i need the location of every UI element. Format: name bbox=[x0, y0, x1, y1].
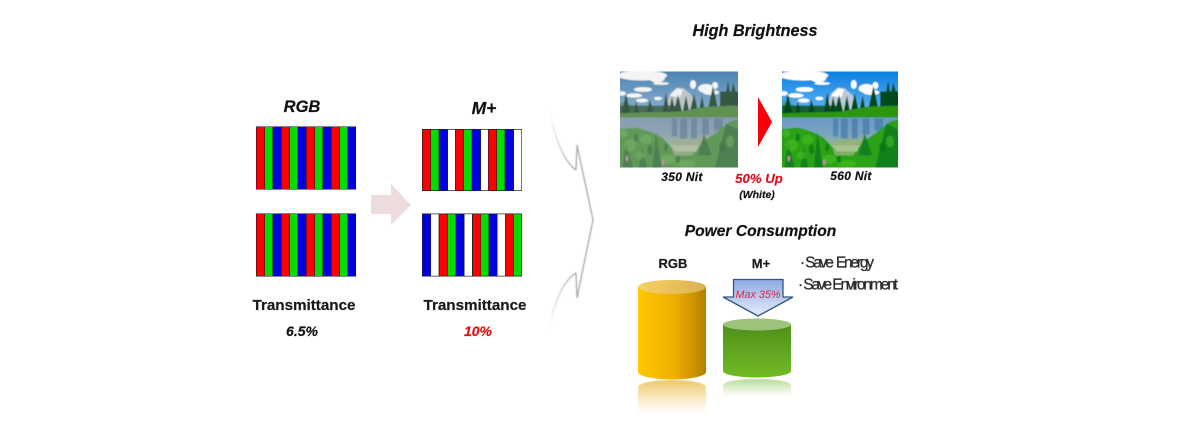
label: Max 35%: Max 35% bbox=[736, 289, 781, 301]
value: 6.5%: 6.5% bbox=[286, 323, 319, 339]
cylinder: RGB power bbox=[638, 280, 706, 380]
label: M+ cylinder: M+ bbox=[752, 256, 771, 271]
bullet: Save Energy: · Save Energy bbox=[800, 254, 874, 272]
arrow: red triangle bbox=[758, 97, 772, 147]
cylinder reflection: RGB bbox=[638, 380, 706, 414]
M+ pixel stripes, top bbox=[422, 129, 522, 191]
arrow: RGB to M+ bbox=[371, 184, 411, 225]
RGB pixel stripes, top bbox=[256, 126, 356, 190]
callout: White: (White) bbox=[739, 189, 775, 201]
photo: 350 nit landscape bbox=[616, 68, 742, 172]
heading: M+: M+ bbox=[472, 98, 496, 118]
cylinder reflection: M+ bbox=[723, 379, 791, 397]
caption: 560 Nit: 560 Nit bbox=[830, 169, 872, 183]
value: 10%: 10% bbox=[464, 323, 493, 339]
caption: 350 Nit: 350 Nit bbox=[661, 170, 703, 184]
label: M+ transmittance: Transmittance bbox=[424, 297, 526, 314]
M+ pixel stripes, bottom bbox=[422, 214, 522, 276]
label: RGB transmittance: Transmittance bbox=[253, 297, 355, 314]
RGB pixel stripes, bottom bbox=[256, 214, 356, 276]
infographic canvas bbox=[252, 24, 898, 412]
heading: RGB: RGB bbox=[284, 98, 320, 116]
callout: 50% Up: 50% Up bbox=[735, 171, 783, 186]
arrow: reduction bbox=[723, 280, 793, 316]
label: RGB cylinder: RGB bbox=[659, 256, 687, 271]
bullet: Save Environment: · Save Environment bbox=[798, 276, 899, 294]
large chevron arrow bbox=[549, 105, 593, 332]
cylinder: M+ power bbox=[723, 318, 791, 378]
heading: High Brightness: High Brightness bbox=[692, 22, 818, 40]
heading: Power Consumption: Power Consumption bbox=[685, 223, 836, 240]
photo: 560 nit landscape bbox=[778, 68, 902, 172]
